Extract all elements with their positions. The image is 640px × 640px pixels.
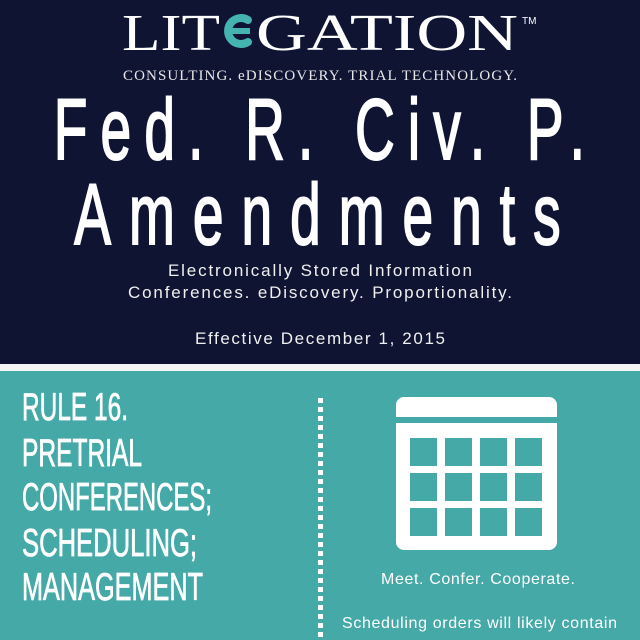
dotted divider (318, 398, 323, 640)
logo: TM (522, 16, 536, 27)
logo: GATION (256, 5, 518, 62)
logo (122, 5, 536, 62)
logo: LIT (122, 5, 220, 62)
rule heading: RULE 16. (22, 386, 128, 429)
rule heading: CONFERENCES; (22, 476, 212, 519)
subtitle: Electronically Stored Information (168, 261, 472, 280)
rule heading: SCHEDULING; (22, 522, 197, 565)
effective date: Effective December 1, 2015 (195, 329, 445, 348)
subtitle (128, 261, 512, 302)
logo tagline: CONSULTING. eDISCOVERY. TRIAL TECHNOLOGY. (123, 68, 517, 84)
divider band (0, 364, 640, 371)
rule heading: PRETRIAL (22, 432, 142, 475)
icon: teal E (228, 18, 250, 44)
rule heading: MANAGEMENT (22, 566, 203, 609)
body text: Scheduling orders will likely contain (342, 615, 617, 632)
icon: calendar (396, 397, 557, 550)
caption: Meet. Confer. Cooperate. (381, 571, 575, 588)
title (54, 83, 585, 263)
subtitle: Conferences. eDiscovery. Proportionality. (128, 283, 512, 302)
title: Fed. R. Civ. P. (54, 83, 585, 178)
header panel (0, 0, 640, 364)
panel: rule 16 (0, 371, 640, 640)
title: Amendments (74, 168, 561, 263)
rule heading (22, 386, 212, 609)
